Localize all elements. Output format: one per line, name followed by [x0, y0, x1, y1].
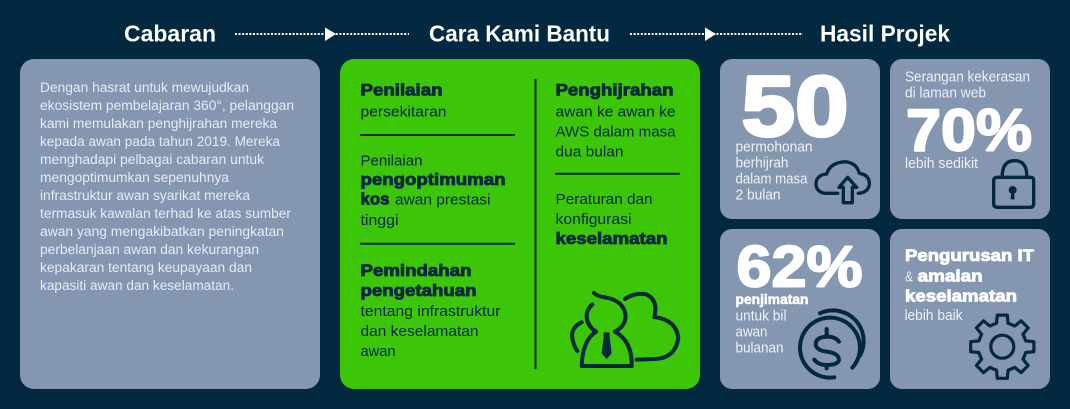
text: Pengurusan IT dan amalan keselamatan: &: [905, 270, 913, 286]
text: Peraturan dan konfigurasi keselamatan: [556, 191, 668, 248]
text: permohonan berhijrah: berhijrah: [736, 156, 788, 172]
text: Peraturan dan konfigurasi keselamatan: konfigurasi: [556, 211, 632, 228]
text block: challenge description: Dengan hasrat untuk mewujudkan: [40, 80, 249, 95]
panel: 50 permohonan: [720, 59, 880, 219]
text: Pengurusan IT dan amalan keselamatan: amalan: [918, 267, 983, 286]
text: Pemindahan pengetahuan: tentang infrastruktur: [360, 303, 501, 320]
text block: challenge description: ekosistem pembelajaran 360°, pelanggan: [40, 98, 294, 113]
text: Peraturan dan konfigurasi keselamatan: keselamatan: [556, 229, 668, 248]
text block: challenge description: [40, 80, 294, 293]
text block: challenge description: kami memulakan penghijrahan mereka: [40, 116, 277, 131]
text: lebih sedikit: lebih sedikit: [905, 156, 978, 172]
text: Penilaian persekitaran: persekitaran: [360, 104, 446, 120]
text block: challenge description: awan yang mengakibatkan peningkatan: [40, 224, 284, 239]
arrow: Cara Kami Bantu to Hasil Projek: [630, 28, 803, 41]
text: Penghijrahan awan ke awan: Penghijrahan: [556, 81, 674, 100]
text: permohonan berhijrah: permohonan: [736, 140, 812, 156]
heading: Cabaran: Cabaran: [124, 20, 216, 46]
text: Serangan kekerasan di laman web: Serangan kekerasan: [905, 70, 1030, 86]
text: Penilaian pengoptimuman kos: [360, 152, 506, 229]
text: Penghijrahan awan ke awan: dua bulan: [556, 144, 624, 160]
text: Pemindahan pengetahuan: [360, 261, 501, 360]
text: Penilaian persekitaran: Penilaian: [360, 81, 442, 100]
icon: cloud upload: [816, 162, 869, 203]
text: Pengurusan IT dan amalan keselamatan: Pengurusan IT: [905, 246, 1035, 265]
text: permohonan berhijrah: [736, 140, 812, 204]
text: Serangan kekerasan di laman web: [905, 70, 1030, 102]
heading: Cara Kami Bantu: Cara Kami Bantu: [429, 20, 610, 46]
text: Penilaian pengoptimuman kos: tinggi: [360, 212, 398, 229]
text block: challenge description: infrastruktur awan syarikat mereka: [40, 188, 250, 203]
icon: padlock: [994, 161, 1034, 207]
text: penjimatan untuk bil awan bulanan: [736, 291, 808, 357]
text block: challenge description: kepada awan pada tahun 2019. Mereka: [40, 134, 280, 149]
panel: 62% penjimatan: [720, 229, 880, 389]
panel: Pengurusan IT: [890, 229, 1050, 389]
text: permohonan berhijrah: 2 bulan: [736, 188, 780, 204]
text: penjimatan untuk bil awan bulanan: untuk bil: [736, 309, 786, 325]
panel: Cara Kami Bantu: [340, 59, 700, 389]
number: 50: 50: [742, 60, 848, 154]
icon: person with cloud: [572, 293, 678, 366]
text: Penghijrahan awan ke awan: awan ke awan ke: [556, 104, 676, 120]
icon: dollar coins: [800, 310, 864, 378]
text: Penilaian persekitaran: [360, 81, 446, 120]
heading: Hasil Projek: Hasil Projek: [820, 20, 950, 46]
text: Pemindahan pengetahuan: pengetahuan: [360, 281, 476, 300]
text: Pemindahan pengetahuan: awan: [360, 343, 396, 360]
panel: 70% serangan: [890, 59, 1050, 219]
text: Penilaian pengoptimuman kos: pengoptimuman: [360, 170, 506, 189]
text: Pemindahan pengetahuan: Pemindahan: [360, 261, 472, 280]
number: 70%: 70%: [906, 97, 1032, 163]
text: Peraturan dan konfigurasi keselamatan: Peraturan dan: [556, 191, 652, 208]
icon: gear: [971, 315, 1034, 378]
text: Pengurusan IT dan amalan keselamatan: keselamatan: [905, 287, 1017, 306]
text: Penghijrahan awan ke awan: AWS dalam masa: [556, 124, 676, 140]
text: permohonan berhijrah: dalam masa: [736, 172, 808, 188]
text: Penilaian pengoptimuman kos: awan prestasi: [395, 192, 490, 208]
text: Pengurusan IT dan amalan keselamatan: lebih baik: [904, 308, 963, 324]
number: 62%: 62%: [736, 234, 862, 299]
text: penjimatan untuk bil awan bulanan: awan: [736, 325, 768, 341]
text block: challenge description: perbelanjaan awan dan kekurangan: [40, 242, 259, 257]
text block: challenge description: menghadapi pelbagai cabaran untuk: [40, 152, 264, 167]
text block: challenge description: kapasiti awan dan keselamatan.: [40, 278, 234, 293]
text block: challenge description: mengoptimumkan sepenuhnya: [40, 170, 229, 185]
panel: Cabaran: [20, 59, 320, 389]
text block: challenge description: termasuk kawalan terhad ke atas sumber: [40, 206, 292, 221]
text: Pemindahan pengetahuan: dan keselamatan: [360, 323, 478, 340]
text: Serangan kekerasan di laman web: di laman web: [905, 86, 986, 102]
text: penjimatan untuk bil awan bulanan: penjimatan: [736, 291, 808, 307]
text: Pengurusan IT dan amalan keselamatan: [904, 246, 1035, 324]
text block: challenge description: kepakaran tentang keupayaan dan: [40, 260, 252, 275]
text: Penghijrahan awan ke awan: [556, 81, 676, 160]
arrow: Cabaran to Cara Kami Bantu: [235, 28, 409, 41]
text: Penilaian pengoptimuman kos: Penilaian: [360, 152, 422, 170]
text: Penilaian pengoptimuman kos: kos: [360, 190, 390, 208]
text: penjimatan untuk bil awan bulanan: bulanan: [736, 341, 784, 357]
